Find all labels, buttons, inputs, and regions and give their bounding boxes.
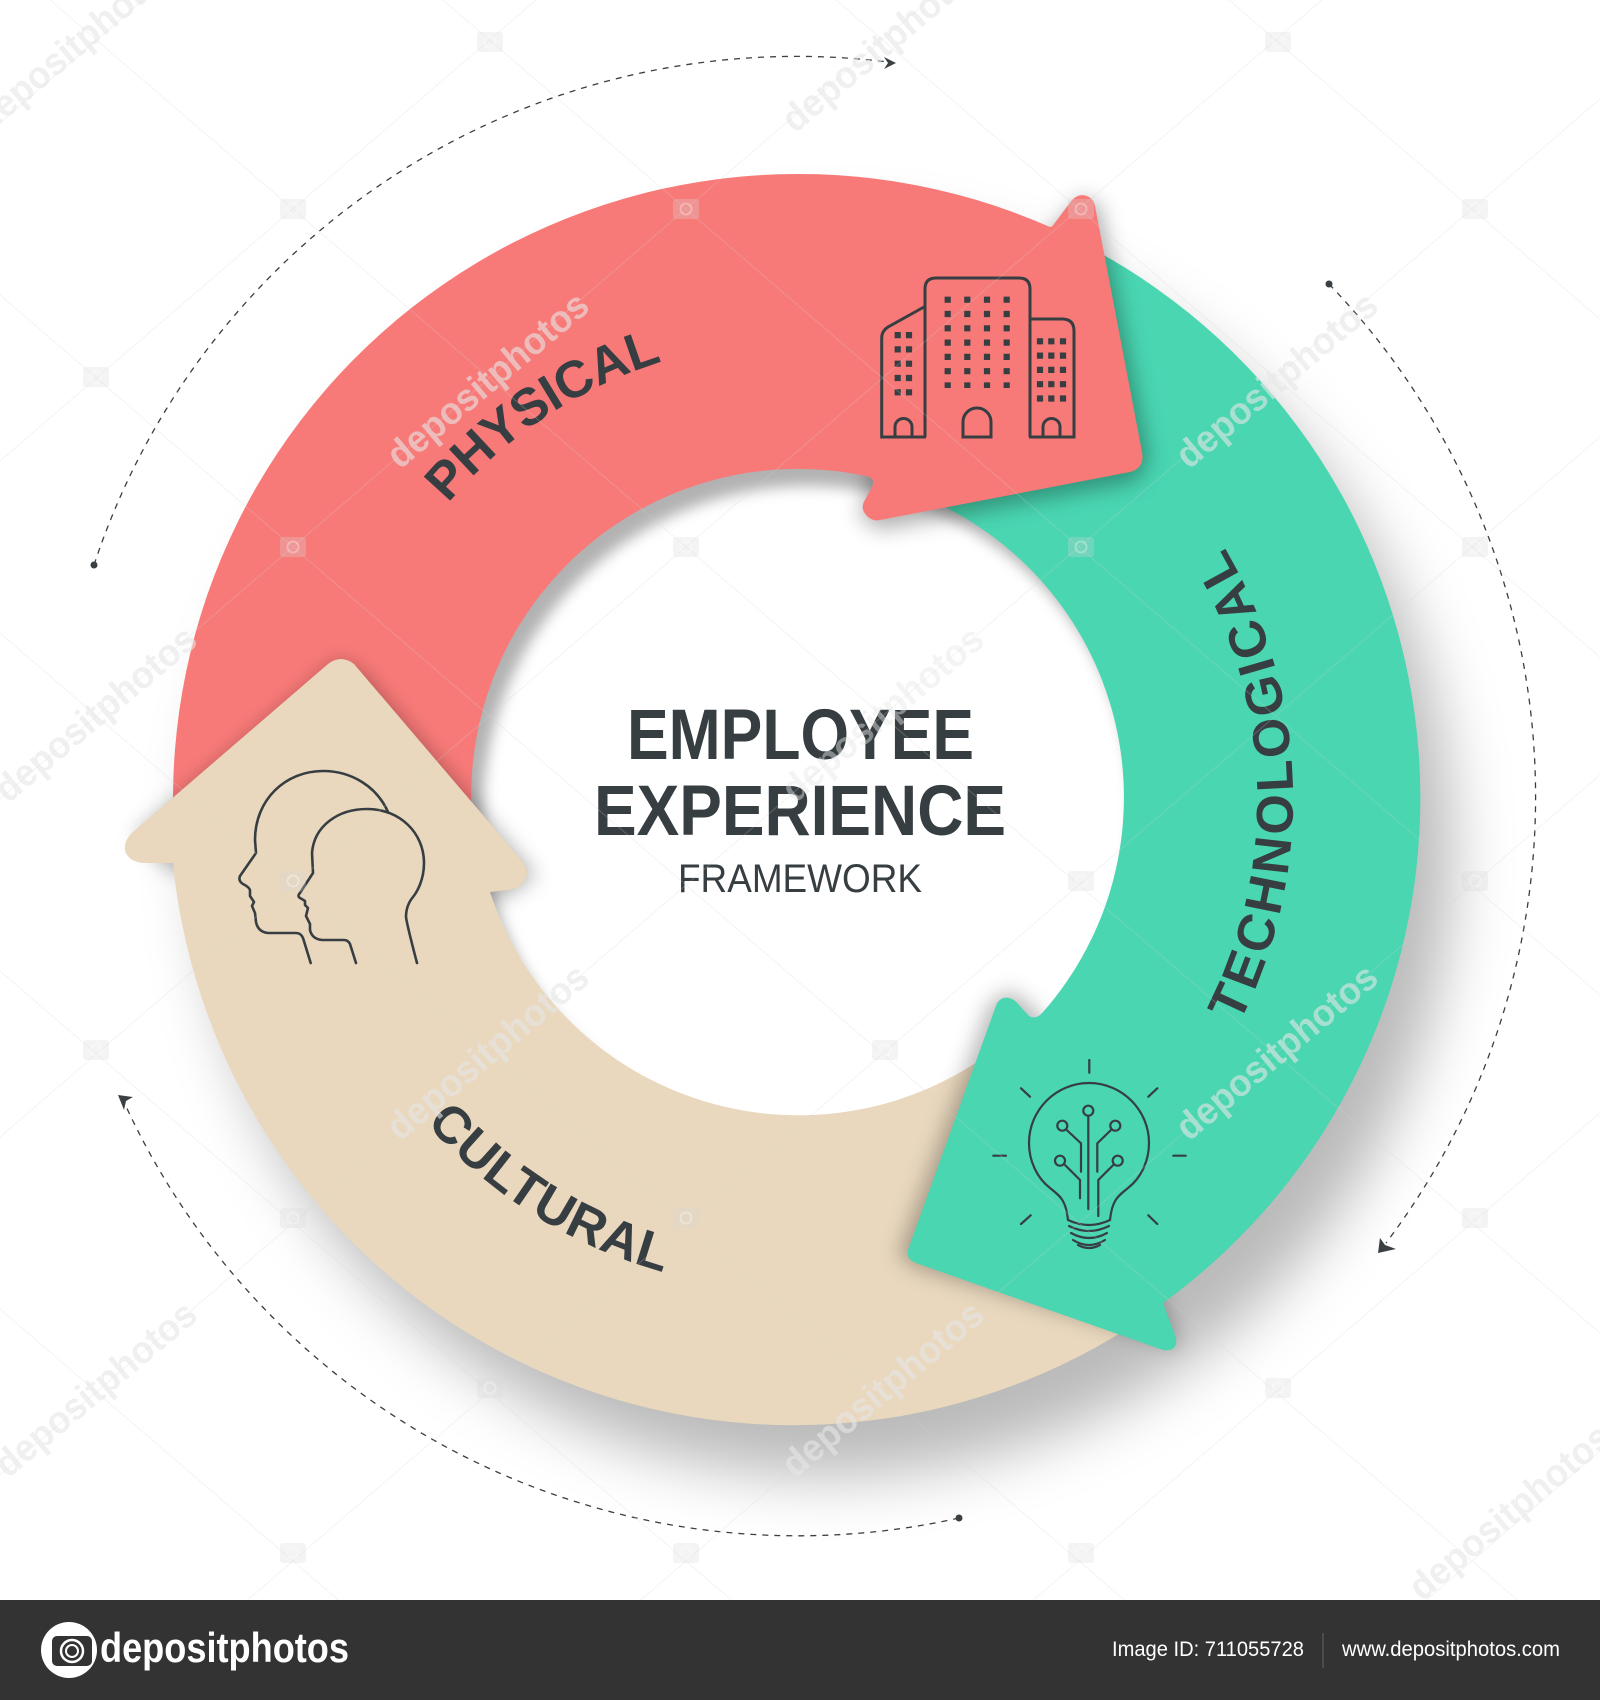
footer image id: Image ID: 711055728 (1112, 1638, 1304, 1661)
title block: EXPERIENCE (594, 772, 1006, 851)
title block: EMPLOYEE (627, 696, 974, 775)
centre hole (466, 467, 1130, 1131)
watermarks: depositphotos (1168, 956, 1386, 1149)
dashed arc: right with arrow (1326, 280, 1536, 1253)
footer bar (0, 1600, 1600, 1700)
panel: cultural arrow head (124, 659, 527, 920)
watermarks: depositphotos (774, 1293, 992, 1486)
watermarks: depositphotos (774, 618, 992, 811)
label: cultural: CULTURAL (434, 1106, 664, 1272)
footer url: www.depositphotos.com (1341, 1638, 1560, 1661)
title block (594, 696, 1006, 901)
label: physical: PHYSICAL (424, 334, 661, 501)
icon: office buildings (882, 278, 1074, 437)
centre hole inner shadow (471, 468, 1124, 1025)
dashed arc: bottom with arrow (118, 1095, 962, 1536)
panel: physical arrow (173, 174, 1142, 830)
shadow of cultural arrow head (135, 660, 536, 900)
shadow of technological arrow head (898, 990, 1180, 1348)
panel: technological arrow (908, 248, 1420, 1350)
shadow of physical arrow head (858, 196, 1150, 530)
footer logo icon (41, 1622, 97, 1678)
watermarks: depositphotos (1168, 284, 1386, 477)
watermark camera marks (83, 32, 1488, 1563)
footer logo text: depositphotos (100, 1624, 349, 1671)
ring ground shadow (204, 228, 1452, 1476)
watermarks: depositphotos (379, 284, 597, 477)
label: technological: TECHNOLOGICAL (1204, 548, 1294, 1013)
dashed arc: top left with arrow (90, 56, 896, 568)
icon: light bulb with circuit (993, 1060, 1186, 1248)
panel: cultural arrow base (125, 659, 1130, 1425)
watermarks: depositphotos (379, 956, 597, 1149)
title block: FRAMEWORK (678, 857, 922, 901)
icon: two head profiles (239, 771, 424, 963)
